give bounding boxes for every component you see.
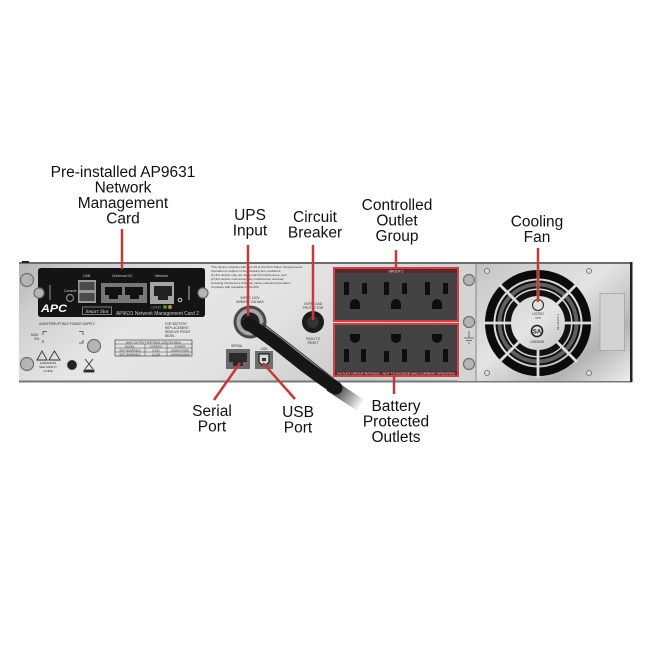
left panel markings: SEE SAFETY xyxy=(39,365,57,369)
card port labels: Network xyxy=(155,274,168,278)
label: cooling fan: Cooling xyxy=(511,214,563,230)
USB port: USB xyxy=(261,347,268,351)
compliance text: including interference that may cause undesired operation. xyxy=(211,281,291,285)
left panel markings: GUIDE xyxy=(43,369,53,373)
warning symbols xyxy=(37,351,94,372)
label: battery protected outlets: Protected xyxy=(363,414,429,430)
screws xyxy=(20,274,474,370)
output ratings table: 1000VA/700W xyxy=(171,348,189,352)
label: UPS input: Input xyxy=(233,222,268,240)
cooling fan xyxy=(483,268,593,378)
Smart Slot badge: Smart Slot xyxy=(85,309,109,315)
power cord xyxy=(249,323,360,405)
compliance text: Complies with Canadian ICES-003. xyxy=(211,285,260,289)
chassis xyxy=(19,261,632,382)
certification marks: MH 11174-3 xyxy=(556,314,560,330)
USB port xyxy=(255,347,273,369)
fan panel details xyxy=(484,268,624,376)
certification marks: UPS xyxy=(535,316,541,320)
label: network management card: Management xyxy=(78,195,169,212)
compliance text xyxy=(211,265,303,289)
battery protected outlets: OUTLET GROUP RATINGS - NOT TO EXCEED MAX CURRENT SPECIFIED xyxy=(337,372,455,376)
serial port xyxy=(226,344,250,369)
power input label xyxy=(236,296,265,304)
output ratings table: 8.33A xyxy=(152,348,160,352)
controlled outlet group: GROUP 1 xyxy=(389,270,404,274)
left panel markings: REPLACEMENT xyxy=(165,326,189,330)
label: network management card: Network xyxy=(95,180,152,196)
card port labels: 10/100 xyxy=(151,306,161,310)
left panel markings: BEZEL xyxy=(165,334,175,338)
certification marks: LISTED xyxy=(532,312,544,316)
output ratings table: POWER xyxy=(175,344,185,348)
output ratings table: 1440VA/1000W xyxy=(170,352,190,356)
circuit breaker: PUSH TO xyxy=(306,337,321,341)
card port labels xyxy=(64,274,168,310)
icon: universal IO ports xyxy=(101,283,147,303)
card port labels: USB xyxy=(83,274,91,278)
label: controlled outlet group: Group xyxy=(375,228,419,245)
label: circuit breaker: Breaker xyxy=(288,224,342,242)
power input label: INPUT: 120V xyxy=(240,296,260,300)
output ratings table: CURRENT xyxy=(149,344,163,348)
left panel markings: UNINTERRUPTIBLE POWER SUPPLY xyxy=(39,322,96,326)
label: controlled outlet group: Controlled xyxy=(362,197,432,214)
output ratings table: 12.00A xyxy=(152,352,161,356)
callout lines xyxy=(122,229,538,400)
output ratings table: SMT 3000RMI2U xyxy=(119,352,141,356)
card port labels: Universal I/O xyxy=(112,274,133,278)
label: network management card: Card xyxy=(106,210,140,228)
left panel markings: REMOVE FRONT xyxy=(165,330,191,334)
label: battery protected outlets: Battery xyxy=(371,398,421,415)
Smart Slot badge xyxy=(82,307,112,315)
label: battery protected outlets: Outlets xyxy=(371,429,421,446)
power input label: 50/60Hz, 12A MAX xyxy=(236,300,265,304)
label: circuit breaker: Circuit xyxy=(293,209,338,226)
controlled outlet group xyxy=(334,268,458,321)
circuit breaker: OVERLOAD xyxy=(304,302,323,306)
APC logo: APC xyxy=(40,303,68,315)
battery protected outlets xyxy=(334,324,458,376)
left panel markings: LINE/MAINS xyxy=(40,361,56,365)
network management card xyxy=(38,268,205,317)
label: cooling fan: Fan xyxy=(524,229,550,246)
compliance text: (2) this device must accept any interference received, xyxy=(211,277,284,281)
label: USB port: Port xyxy=(284,420,313,436)
label: controlled outlet group: Outlet xyxy=(376,212,418,230)
label: UPS input: UPS xyxy=(234,207,266,224)
serial port: SERIAL xyxy=(231,344,243,348)
left panel markings: FOR BATTERY xyxy=(165,322,188,326)
output ratings table: MAX OUTPUT RATINGS 120V 50-60Hz xyxy=(126,340,182,344)
left panel markings: S/N xyxy=(34,337,40,341)
circuit breaker xyxy=(302,302,324,345)
certification marks: LR63938 xyxy=(530,340,544,344)
compliance text: This device complies with Part 15 of the FCC Rules. Requirements xyxy=(211,265,303,269)
compliance text: (1) this device may not cause harmful interference, and xyxy=(211,273,287,277)
certification marks xyxy=(530,300,560,344)
output ratings table: SMT 3000RMI2U xyxy=(119,348,141,352)
ground symbol xyxy=(464,331,474,343)
label: network management card: Pre-installed AP9631 xyxy=(51,164,195,181)
compliance text: Operation is subject to the following two conditions: xyxy=(211,269,281,273)
icon: network port xyxy=(150,282,174,304)
left panel markings: MOD xyxy=(31,333,39,337)
label: serial port: Serial xyxy=(192,403,232,420)
icon: USB ports xyxy=(78,280,96,303)
output ratings table: MODEL xyxy=(125,344,135,348)
label: serial port: Port xyxy=(198,418,227,436)
circuit breaker: PROTECTOR xyxy=(303,306,324,310)
label: USB port: USB xyxy=(282,404,314,421)
output ratings table xyxy=(115,340,192,356)
card port labels: Console xyxy=(64,289,77,293)
UPS input gland xyxy=(234,306,266,338)
left panel markings xyxy=(31,322,192,373)
certification marks: SA xyxy=(533,330,542,336)
card name: AP9631 Network Management Card 2 xyxy=(116,311,199,317)
circuit breaker: RESET xyxy=(308,341,318,345)
